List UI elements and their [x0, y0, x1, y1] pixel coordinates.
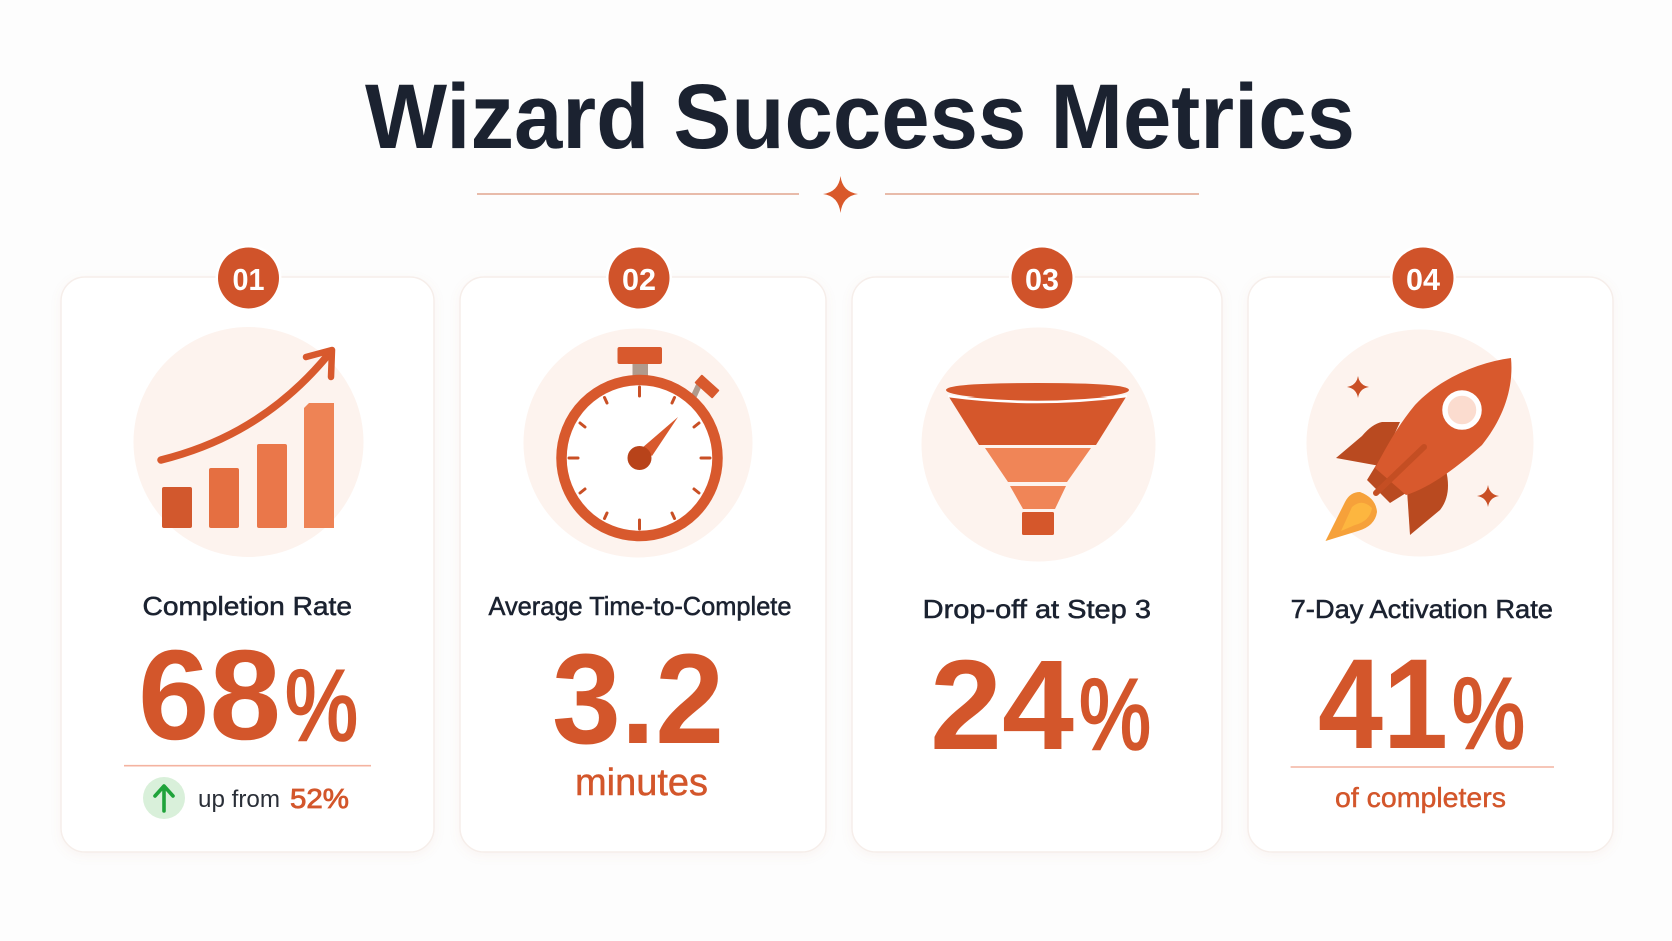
value: 41%	[1318, 633, 1525, 776]
icon: stopwatch	[524, 328, 752, 558]
label: completion rate: Completion Rate	[142, 591, 352, 621]
panel: average time-to-complete	[460, 245, 826, 852]
card background 4	[1248, 277, 1613, 852]
badge 03: 03	[1025, 262, 1059, 297]
icon: bar chart with rising arrow	[134, 327, 364, 557]
panel: 7-day activation rate	[1248, 245, 1613, 852]
label: drop-off at step 3: Drop-off at Step 3	[923, 594, 1151, 624]
label: 7-day activation rate: 7-Day Activation Rate	[1291, 594, 1553, 624]
card background 1	[61, 277, 434, 852]
card background 2	[460, 277, 826, 852]
value: 68%: %	[285, 650, 358, 762]
badge 02	[606, 245, 672, 311]
card background 3	[852, 277, 1222, 852]
value: 24%: 24	[930, 634, 1074, 777]
trend: up from 52%	[143, 777, 349, 819]
title: Wizard Success Metrics	[365, 66, 1355, 168]
unit: minutes: minutes	[575, 762, 708, 804]
title divider with star	[477, 176, 1199, 213]
badge 01	[216, 245, 282, 311]
label: average time-to-complete: Average Time-to-Complete	[488, 591, 792, 621]
icon: rocket	[1306, 330, 1534, 556]
value: 24%: %	[1079, 659, 1151, 771]
value: 41%: %	[1452, 658, 1525, 770]
badge 04: 04	[1406, 262, 1441, 297]
note: of completers: of completers	[1335, 782, 1506, 813]
panel: completion rate	[61, 245, 434, 852]
panel: drop-off at step 3	[852, 245, 1222, 852]
trend: up from 52%: up from	[198, 786, 280, 813]
value: 68%: 68	[138, 624, 281, 767]
value: 24%	[930, 634, 1151, 777]
badge 02: 02	[622, 262, 656, 297]
badge 03	[1009, 245, 1075, 311]
value: 3.2: 3.2	[552, 628, 724, 771]
badge 01: 01	[232, 262, 264, 297]
badge 04	[1390, 245, 1456, 311]
value: 68%	[138, 624, 358, 767]
value: 41%: 41	[1318, 633, 1448, 776]
trend: up from 52%: 52%	[290, 783, 349, 814]
icon: funnel	[922, 328, 1156, 562]
